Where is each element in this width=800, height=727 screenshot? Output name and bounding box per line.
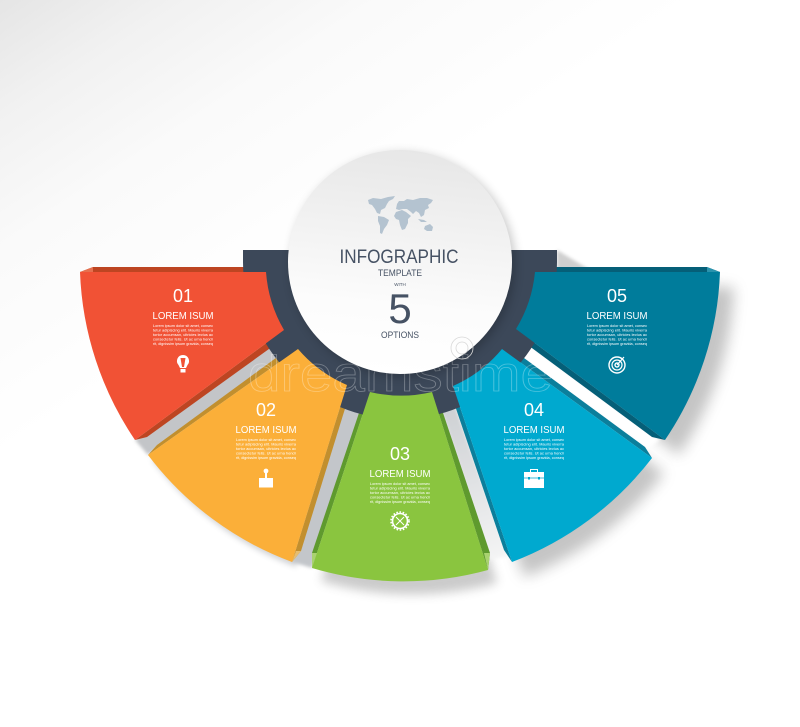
- label: with: WITH: [394, 282, 406, 287]
- body text 05: Lorem ipsum dolor sit amet, consec: [587, 324, 647, 328]
- panel: option 02: [148, 349, 347, 562]
- heading 03: LOREM ISUM: [370, 468, 430, 480]
- panel: option 01: [80, 272, 284, 440]
- body text 01: rit, dignissim ipsum gravida, conseq: [153, 342, 213, 346]
- number 01: 01: [173, 286, 193, 306]
- heading 01: LOREM ISUM: [152, 310, 214, 322]
- body text 02: tortor accumsan, ultricies lectus ac: [236, 447, 296, 451]
- body text 01: consectetur felis. Ut ac urna hendr: [153, 338, 214, 342]
- body text 01: Lorem ipsum dolor sit amet, consec: [153, 324, 213, 328]
- body text 01: tortor accumsan, ultricies lectus ac: [153, 333, 213, 337]
- number 03: 03: [390, 444, 410, 464]
- number 05: 05: [607, 286, 627, 306]
- body text 02: consectetur felis. Ut ac urna hendr: [236, 452, 297, 456]
- body text 02: rit, dignissim ipsum gravida, conseq: [236, 456, 296, 460]
- label: options: OPTIONS: [381, 330, 419, 341]
- number 02: 02: [256, 400, 276, 420]
- body text 03: tetur adipiscing elit. Mauris viverra: [370, 486, 431, 490]
- watermark: dreamstime: [248, 346, 553, 402]
- body text 05: tetur adipiscing elit. Mauris viverra: [587, 328, 648, 332]
- heading 02: LOREM ISUM: [236, 424, 296, 436]
- body text 03: consectetur felis. Ut ac urna hendr: [370, 496, 431, 500]
- panel: option 04: [453, 349, 652, 562]
- body text 01: tetur adipiscing elit. Mauris viverra: [153, 328, 214, 332]
- body text 02: Lorem ipsum dolor sit amet, consec: [236, 438, 296, 442]
- icon: light bulb: [177, 355, 189, 372]
- body text 05: tortor accumsan, ultricies lectus ac: [587, 333, 647, 337]
- center disc shadow: [291, 153, 515, 377]
- body text 04: consectetur felis. Ut ac urna hendr: [504, 452, 565, 456]
- body text 02: [236, 438, 297, 460]
- heading 05: LOREM ISUM: [586, 310, 648, 322]
- icon: briefcase: [524, 470, 544, 488]
- body text 04: rit, dignissim ipsum gravida, conseq: [504, 456, 564, 460]
- icon: target: [609, 357, 625, 373]
- segment shadows: [135, 250, 734, 594]
- icon: person: [259, 469, 273, 488]
- body text 05: consectetur felis. Ut ac urna hendr: [587, 338, 648, 342]
- panel: option 03: [312, 392, 488, 581]
- body text 03: [370, 482, 431, 504]
- body text 03: tortor accumsan, ultricies lectus ac: [370, 491, 430, 495]
- watermark logo: [451, 337, 473, 359]
- number 5: 5: [388, 285, 412, 332]
- body text 04: Lorem ipsum dolor sit amet, consec: [504, 438, 564, 442]
- heading 04: LOREM ISUM: [504, 424, 564, 436]
- folded edges of segments: [80, 267, 720, 570]
- dark hub ring: [243, 250, 557, 419]
- icon: world map: [368, 196, 433, 234]
- panel: option 05: [516, 272, 720, 440]
- body text 04: tortor accumsan, ultricies lectus ac: [504, 447, 564, 451]
- icon: gear: [391, 512, 409, 530]
- title: INFOGRAPHIC: [340, 247, 458, 268]
- body text 03: rit, dignissim ipsum gravida, conseq: [370, 500, 430, 504]
- body text 03: Lorem ipsum dolor sit amet, consec: [370, 482, 430, 486]
- body text 05: [587, 324, 648, 346]
- body text 01: [153, 324, 214, 346]
- body text 04: tetur adipiscing elit. Mauris viverra: [504, 442, 565, 446]
- center disc: [288, 150, 512, 374]
- number 04: 04: [524, 400, 544, 420]
- subtitle: template: TEMPLATE: [378, 268, 422, 279]
- body text 02: tetur adipiscing elit. Mauris viverra: [236, 442, 297, 446]
- body text 04: [504, 438, 565, 460]
- body text 05: rit, dignissim ipsum gravida, conseq: [587, 342, 647, 346]
